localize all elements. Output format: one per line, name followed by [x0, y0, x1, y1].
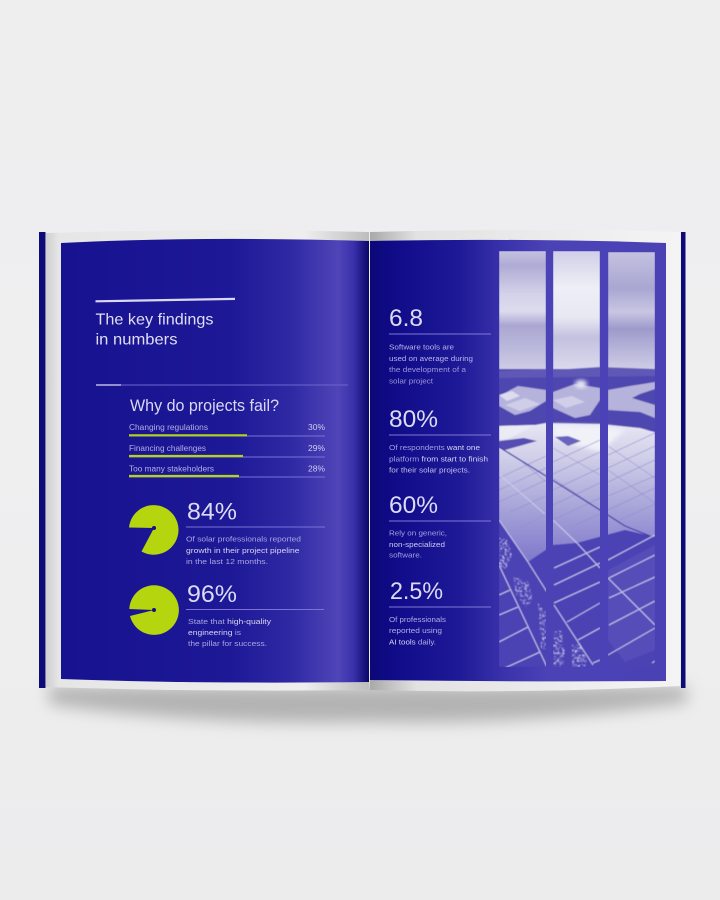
stat: 60%: Rely on generic,	[389, 528, 447, 538]
stat: 84%: 84%	[187, 498, 237, 526]
stat: 60%: 60%	[389, 492, 438, 519]
right page paper	[370, 230, 680, 691]
bar: changing regulations	[129, 423, 325, 436]
description 84%: Of solar professionals reported	[186, 534, 301, 544]
description 84%: in the last 12 months.	[186, 557, 268, 566]
bar: financing challenges: 29%	[308, 444, 325, 453]
panel: right page	[370, 230, 680, 691]
description 96%: the pillar for success.	[188, 639, 267, 648]
stat: 2.5%: AI tools daily.	[389, 638, 436, 646]
bar: changing regulations: 30%	[308, 423, 325, 432]
description 96%: State that high-quality	[188, 617, 271, 626]
description 84%: growth in their project pipeline	[186, 546, 300, 555]
bright grid lines	[499, 475, 655, 668]
bar: too many stakeholders: 28%	[308, 464, 325, 474]
stat: 60%: software.	[389, 550, 422, 560]
stat: 80%	[389, 406, 491, 474]
stat: 80%: platform from start to finish	[389, 454, 488, 464]
fine panel grid lines	[499, 432, 655, 510]
dark horizon and mid-ground	[499, 369, 655, 429]
description 96%	[188, 617, 271, 648]
photo: solar panels in three vertical strips	[499, 251, 655, 668]
description 96%: engineering is	[188, 628, 241, 637]
navy back cover edges	[39, 232, 686, 688]
stat: 6.8: solar project	[389, 376, 434, 386]
stat: 2.5%: 2.5%	[390, 578, 443, 605]
panel: left page	[46, 230, 369, 691]
dark ridge line across the panel	[499, 447, 655, 538]
stat: 6.8: the development of a	[389, 365, 467, 374]
foliage speckles	[499, 537, 587, 667]
pie chart 84%	[129, 505, 178, 555]
section divider	[96, 384, 348, 386]
stat: 6.8: 6.8	[389, 305, 423, 332]
stat: 96%: 96%	[187, 581, 237, 608]
bar: too many stakeholders	[129, 464, 325, 477]
stat: 80%: Of respondents want one	[389, 443, 480, 452]
large foreground panel	[499, 423, 655, 562]
bar: financing challenges	[129, 444, 325, 457]
bar: too many stakeholders: Too many stakeholders	[129, 464, 214, 474]
bar: financing challenges: Financing challenges	[129, 444, 206, 453]
title: The key findings	[96, 312, 214, 328]
right page blue	[370, 240, 666, 681]
title: in numbers	[96, 332, 178, 348]
stat: 6.8	[389, 305, 491, 386]
chart heading: Why do projects fail?	[130, 396, 279, 415]
description 84%	[186, 534, 301, 566]
book shadow	[48, 686, 688, 723]
bar chart: why do projects fail	[129, 396, 325, 477]
stat: 96%	[129, 581, 324, 648]
stat: 80%: for their solar projects.	[389, 466, 470, 474]
left page paper	[46, 230, 369, 691]
stat: 80%: 80%	[389, 406, 438, 433]
title	[96, 312, 214, 348]
stat: 6.8: Software tools are	[389, 342, 454, 352]
stat: 6.8: used on average during	[389, 354, 473, 363]
stat: 84%	[129, 498, 325, 566]
heading rule	[96, 299, 235, 301]
distant solar tiles	[499, 380, 655, 418]
pie chart 96%	[129, 585, 179, 635]
stat: 60%: non-specialized	[389, 540, 445, 549]
stat: 2.5%: Of professionals	[389, 615, 446, 624]
lower shaded panel	[499, 520, 655, 667]
left page blue	[61, 239, 369, 683]
bar: changing regulations: Changing regulations	[129, 423, 208, 432]
stat: 2.5%: reported using	[389, 626, 442, 635]
stat: 60%	[389, 492, 491, 560]
stat: 2.5%	[389, 578, 491, 646]
